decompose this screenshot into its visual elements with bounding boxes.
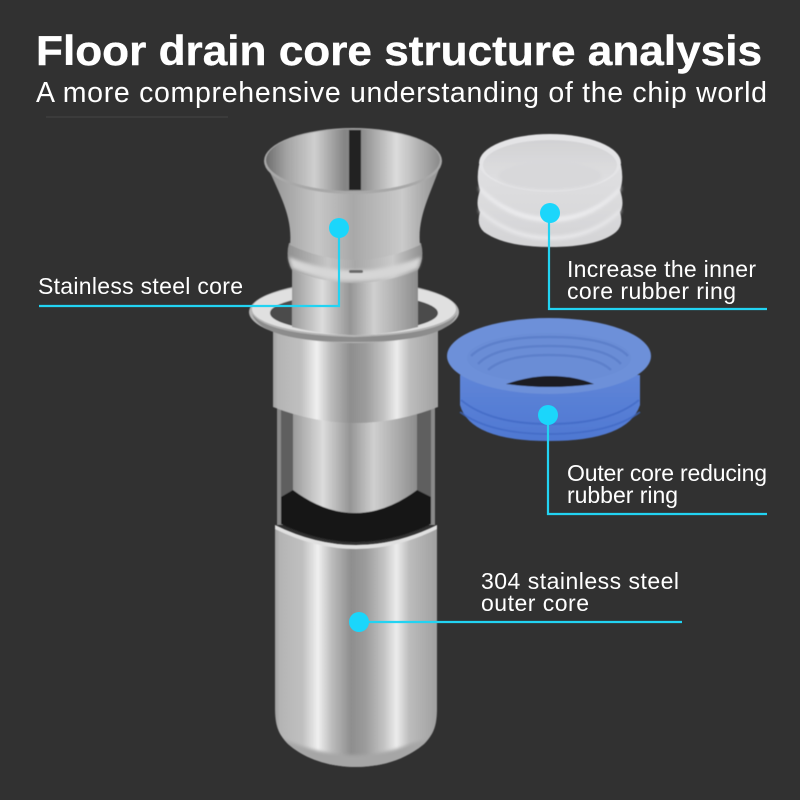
callout: inner core rubber ring (540, 203, 767, 309)
callout: outer core reducing ring: Outer core reducing (567, 460, 767, 486)
callout: 304 stainless steel outer core: 304 stainless steel (481, 568, 679, 594)
inner core upper (292, 262, 418, 335)
subtitle: A more comprehensive understanding of the chip world (36, 77, 767, 109)
callout: 304 stainless steel outer core (349, 568, 682, 632)
blue ring (447, 318, 651, 441)
upper outer tube (273, 330, 438, 423)
bead (288, 243, 422, 283)
funnel body (266, 163, 441, 260)
window backing (277, 400, 435, 542)
drain assembly (249, 128, 651, 770)
callout: outer core reducing ring: rubber ring (567, 482, 678, 508)
funnel rim (264, 128, 442, 194)
callout: outer core reducing ring (538, 405, 767, 514)
callout: 304 stainless steel outer core: outer core (481, 590, 589, 616)
flange (249, 281, 459, 343)
callout: inner core rubber ring: Increase the inner (567, 256, 756, 282)
callout: inner core rubber ring: core rubber ring (567, 278, 736, 304)
white ring (478, 134, 622, 247)
bead seam (349, 270, 363, 273)
funnel interior (266, 129, 440, 191)
inner core in window (293, 400, 417, 513)
lower tube bottom cap (286, 741, 422, 768)
callout: stainless steel core: Stainless steel core (38, 273, 243, 299)
title: Floor drain core structure analysis (36, 27, 762, 74)
lower outer tube (270, 525, 442, 770)
callout: stainless steel core (38, 218, 349, 306)
funnel dark stripe (349, 130, 361, 190)
